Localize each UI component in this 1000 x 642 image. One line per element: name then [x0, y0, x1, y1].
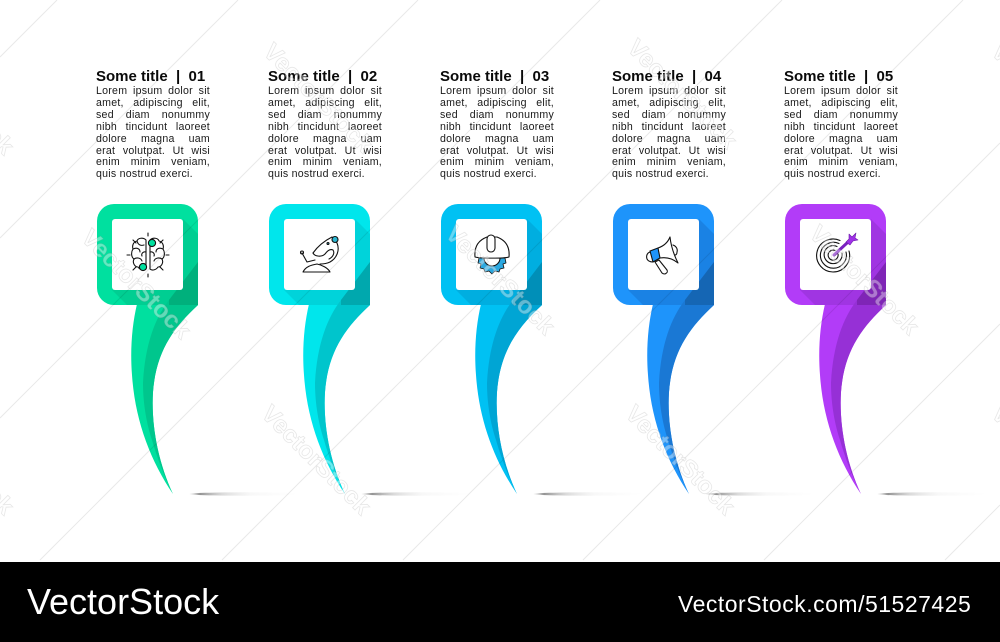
text block 4: Lorem ipsum dolor sit: [612, 85, 726, 97]
text block 4: enim minim veniam,: [612, 156, 726, 168]
text block 1: sed diam nonummy: [96, 109, 210, 121]
text block 4: quis nostrud exerci.: [612, 168, 709, 180]
text block 4: [612, 68, 726, 180]
text block 1: amet, adipiscing elit,: [96, 97, 210, 109]
footer logo: VectorStock: [27, 581, 219, 622]
text block 5: amet, adipiscing elit,: [784, 97, 898, 109]
icon: brain: [127, 233, 169, 277]
text block 4: Some title | 04: [612, 68, 721, 85]
text block 2: nibh tincidunt laoreet: [268, 121, 382, 133]
text block 3: sed diam nonummy: [440, 109, 554, 121]
text block 5: Some title | 05: [784, 68, 893, 85]
text block 2: Some title | 02: [268, 68, 377, 85]
text block 5: [784, 68, 898, 180]
text block 1: enim minim veniam,: [96, 156, 210, 168]
text block 3: erat volutpat. Ut wisi: [440, 145, 554, 157]
text block 1: Lorem ipsum dolor sit: [96, 85, 210, 97]
text block 2: quis nostrud exerci.: [268, 168, 365, 180]
footer bar: [0, 562, 1000, 642]
text block 2: [268, 68, 382, 180]
text block 4: nibh tincidunt laoreet: [612, 121, 726, 133]
text block 5: sed diam nonummy: [784, 109, 898, 121]
watermark overlay: VectorStock: [258, 38, 378, 159]
text block 2: enim minim veniam,: [268, 156, 382, 168]
footer image id: VectorStock.com/51527425: [678, 591, 971, 617]
text block 2: sed diam nonummy: [268, 109, 382, 121]
text block 4: amet, adipiscing elit,: [612, 97, 726, 109]
text block 3: enim minim veniam,: [440, 156, 554, 168]
icon: helmet with gear: [475, 235, 509, 274]
watermark overlay: VectorStock: [440, 220, 560, 341]
text block 5: nibh tincidunt laoreet: [784, 121, 898, 133]
text block 1: Some title | 01: [96, 68, 205, 85]
text block 1: erat volutpat. Ut wisi: [96, 145, 210, 157]
watermark overlay: VectorStock: [622, 34, 742, 155]
text block 4: erat volutpat. Ut wisi: [612, 145, 726, 157]
text block 4: dolore magna uam: [612, 133, 726, 145]
text block 1: quis nostrud exerci.: [96, 168, 193, 180]
text block 5: enim minim veniam,: [784, 156, 898, 168]
text block 5: Lorem ipsum dolor sit: [784, 85, 898, 97]
text block 1: [96, 68, 210, 180]
icon: target with arrow: [817, 233, 858, 272]
watermark overlay: VectorStock: [256, 400, 376, 521]
text block 3: Lorem ipsum dolor sit: [440, 85, 554, 97]
text block 3: nibh tincidunt laoreet: [440, 121, 554, 133]
watermark overlay: VectorStock: [804, 220, 924, 341]
text block 5: erat volutpat. Ut wisi: [784, 145, 898, 157]
text block 2: dolore magna uam: [268, 133, 382, 145]
text block 5: quis nostrud exerci.: [784, 168, 881, 180]
text block 3: Some title | 03: [440, 68, 549, 85]
icon: microscope: [300, 236, 338, 272]
text block 1: dolore magna uam: [96, 133, 210, 145]
text block 3: dolore magna uam: [440, 133, 554, 145]
watermark overlay: VectorStock: [620, 400, 740, 521]
text block 2: amet, adipiscing elit,: [268, 97, 382, 109]
text block 3: quis nostrud exerci.: [440, 168, 537, 180]
text block 4: sed diam nonummy: [612, 109, 726, 121]
watermark overlay: VectorStock: [76, 224, 196, 345]
text block 2: erat volutpat. Ut wisi: [268, 145, 382, 157]
text block 3: amet, adipiscing elit,: [440, 97, 554, 109]
text block 5: dolore magna uam: [784, 133, 898, 145]
icon: megaphone: [647, 237, 678, 274]
text block 2: Lorem ipsum dolor sit: [268, 85, 382, 97]
text block 3: [440, 68, 554, 180]
text block 1: nibh tincidunt laoreet: [96, 121, 210, 133]
